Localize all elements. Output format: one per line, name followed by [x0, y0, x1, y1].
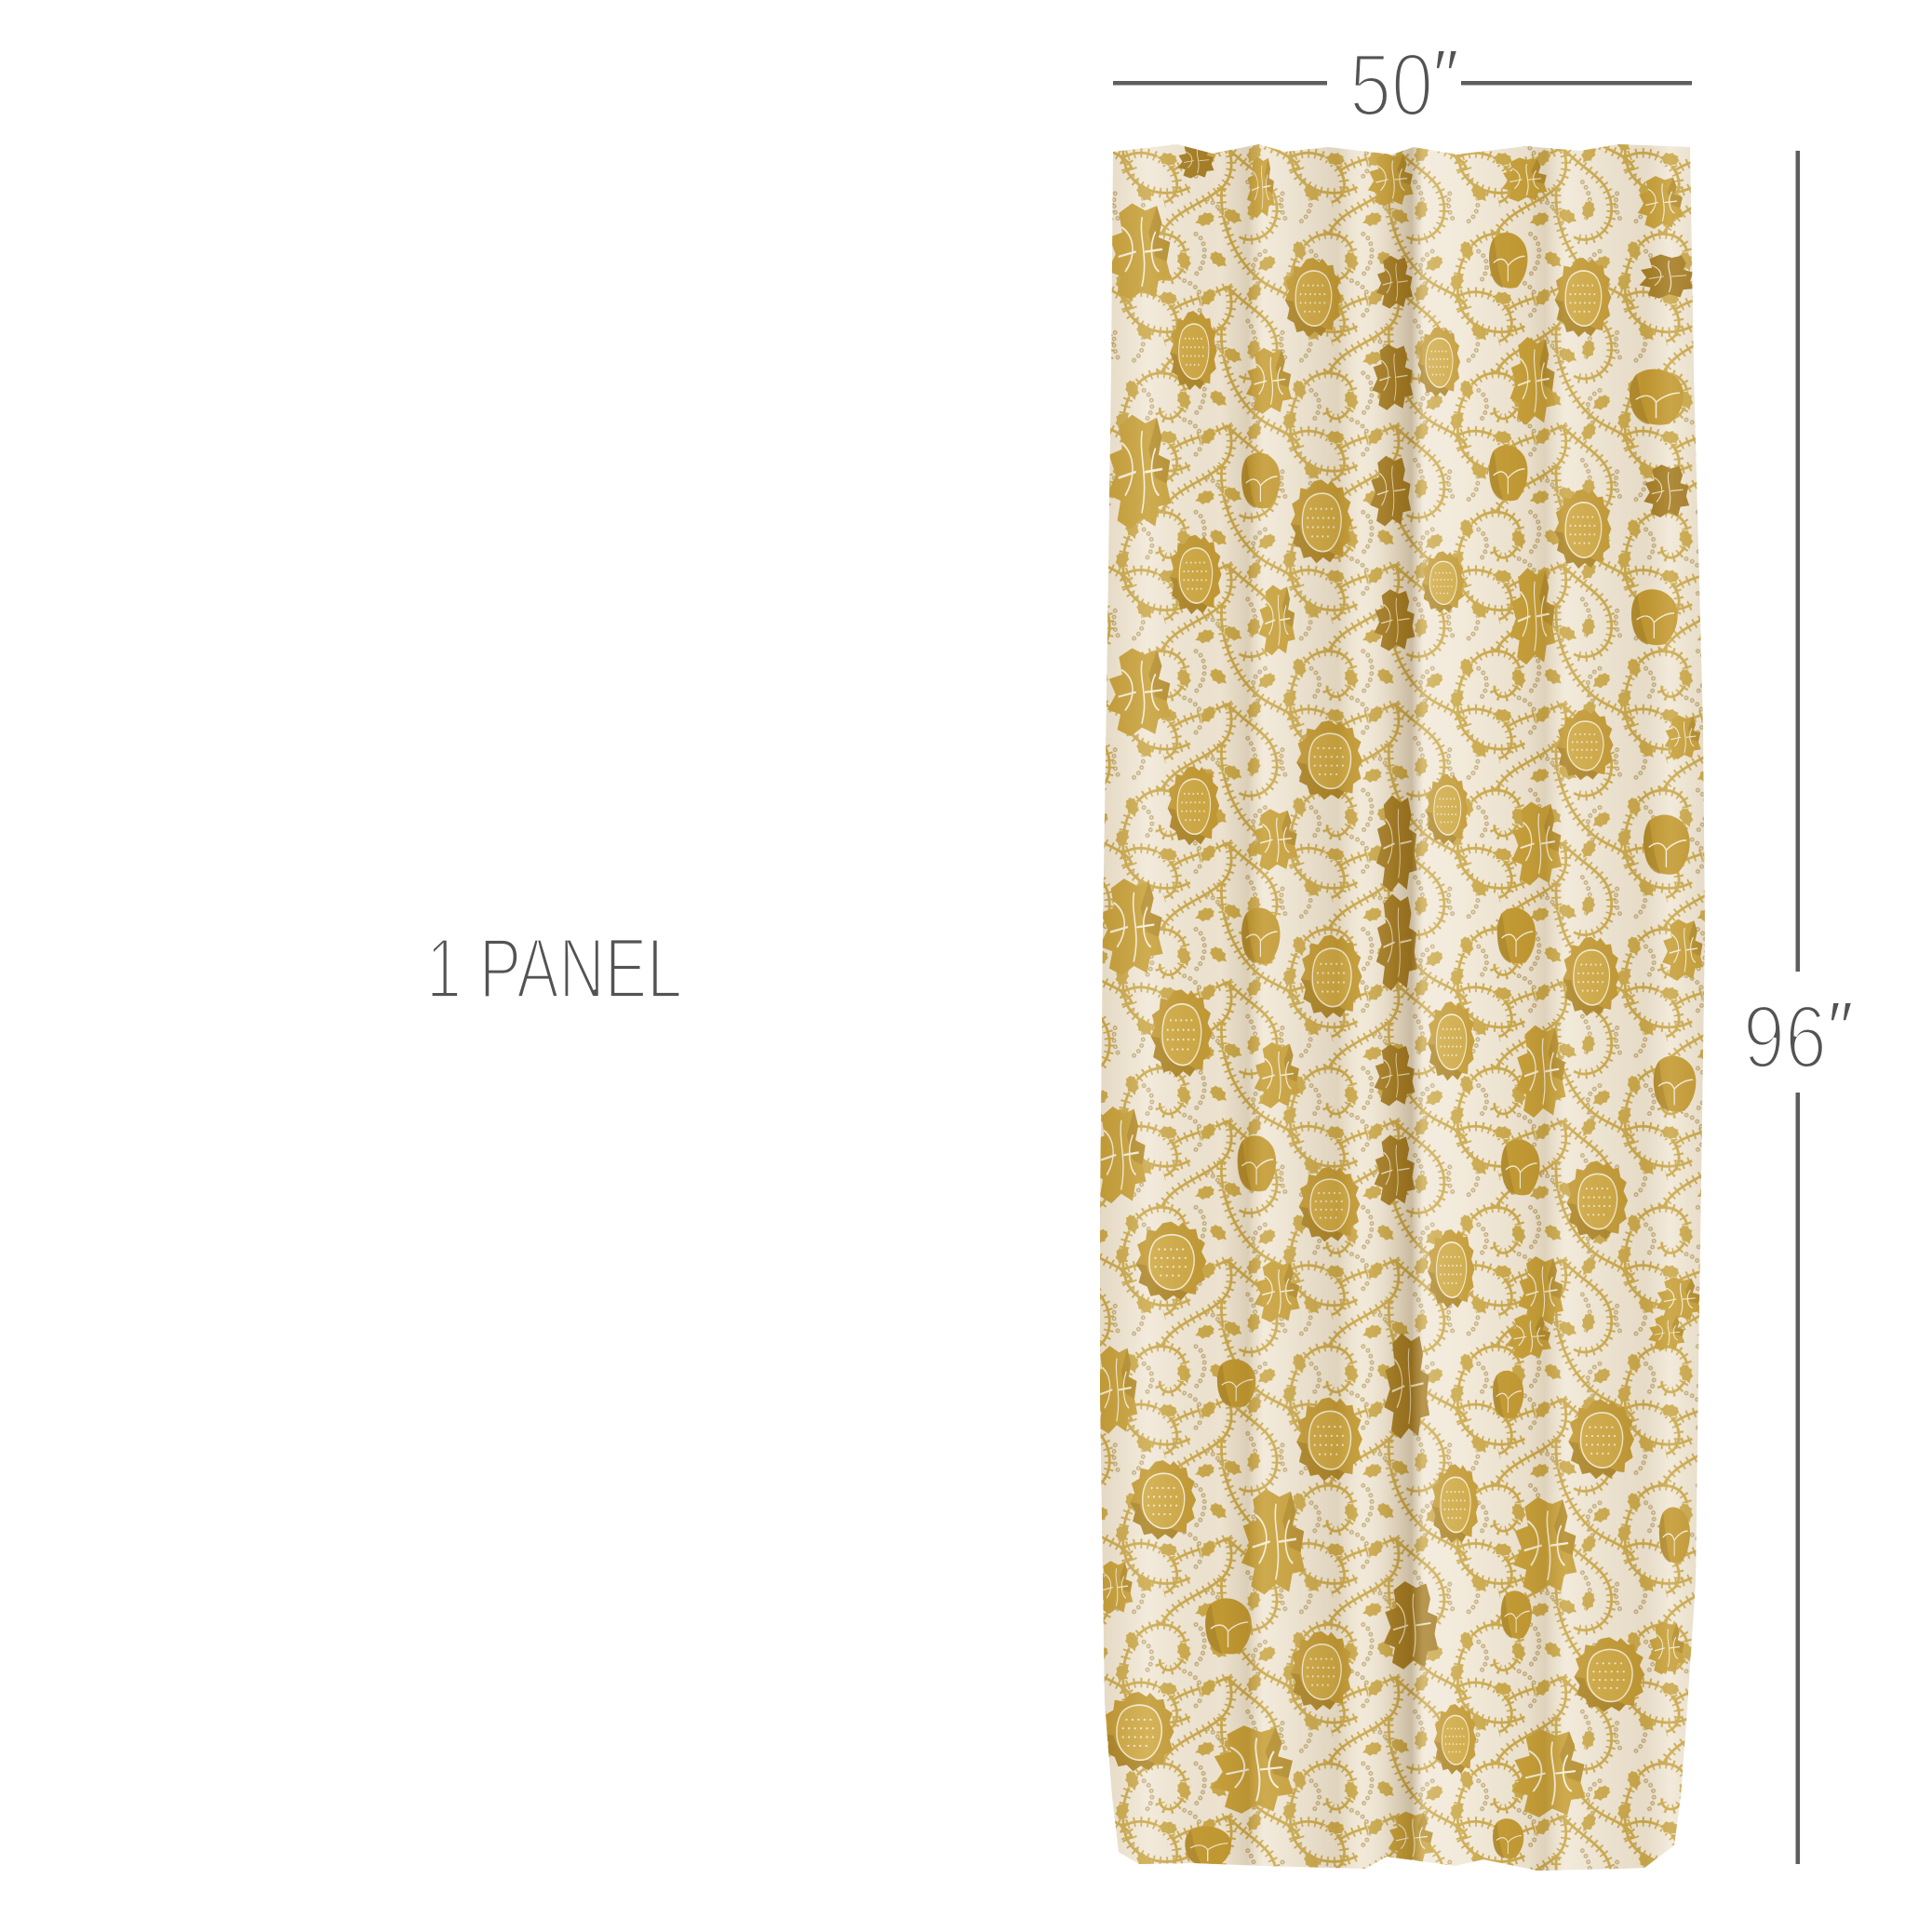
height dimension: 96 inches: ″ — [1824, 986, 1852, 1068]
width dimension: 50 inches — [1113, 34, 1692, 135]
flowers: lower section — [1092, 1315, 1690, 1866]
width dimension: 50 inches: 50 — [1349, 35, 1433, 135]
curtain panel with floral print — [1089, 130, 1722, 1880]
height dimension: 96 inches — [1743, 151, 1852, 1864]
width dimension: 50 inches: ″ — [1429, 34, 1457, 116]
fold shading — [1089, 130, 1722, 1880]
flowers: middle section — [1092, 710, 1703, 1327]
height dimension: 96 inches: 96 — [1743, 987, 1827, 1087]
fabric base — [1089, 130, 1722, 1880]
text: panel count: 1 PANEL — [426, 921, 682, 1016]
vine and dot print — [1089, 130, 1722, 1880]
flowers: upper section — [1107, 143, 1694, 736]
